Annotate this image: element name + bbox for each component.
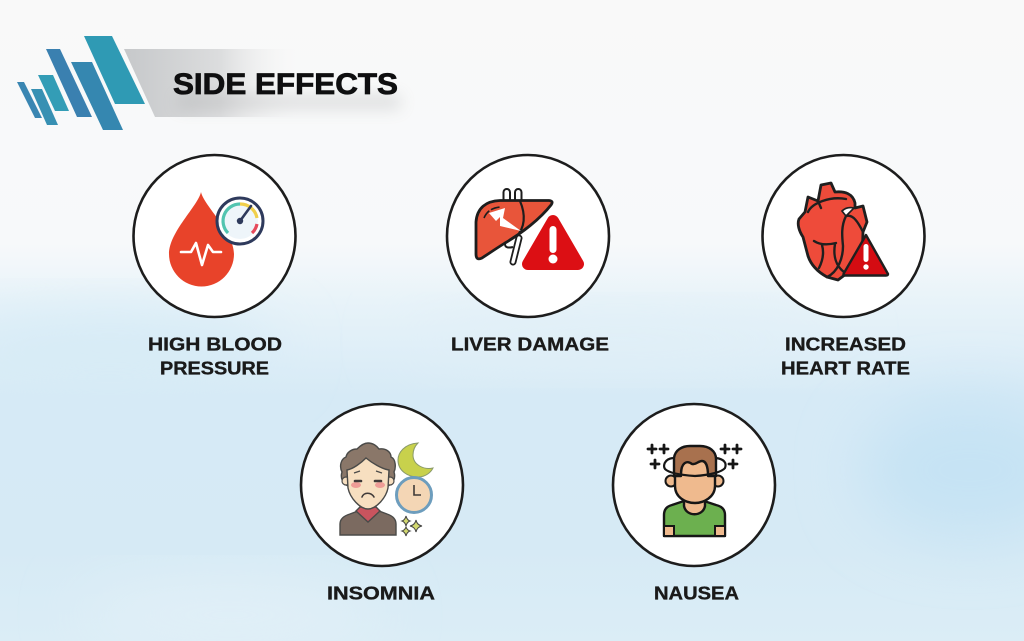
item: high blood pressure [134,155,296,378]
label: NAUSEA [654,584,739,604]
label [148,334,282,378]
header [17,36,400,130]
circle [447,155,609,317]
label: HEART RATE [781,358,910,378]
title banner [124,49,400,117]
circle [301,404,463,566]
icon: liver with warning [476,189,578,264]
icon: dizzy person [648,445,741,536]
logo bars [17,36,145,130]
icon: blood drop with gauge [169,192,263,286]
item: liver damage [447,155,609,354]
icon: heart with warning [798,183,888,280]
title: SIDE EFFECTS [173,68,398,101]
label: HIGH BLOOD [148,334,282,354]
label: LIVER DAMAGE [451,334,609,354]
circle [134,155,296,317]
circle [762,155,924,317]
icon: tired person with moon and clock [340,443,433,536]
item: nausea [613,404,775,604]
label: INCREASED [785,334,906,354]
item: increased heart rate [762,155,924,378]
circle [613,404,775,566]
label: INSOMNIA [327,584,435,604]
item: insomnia [301,404,463,604]
label: PRESSURE [160,358,269,378]
label [781,334,910,378]
